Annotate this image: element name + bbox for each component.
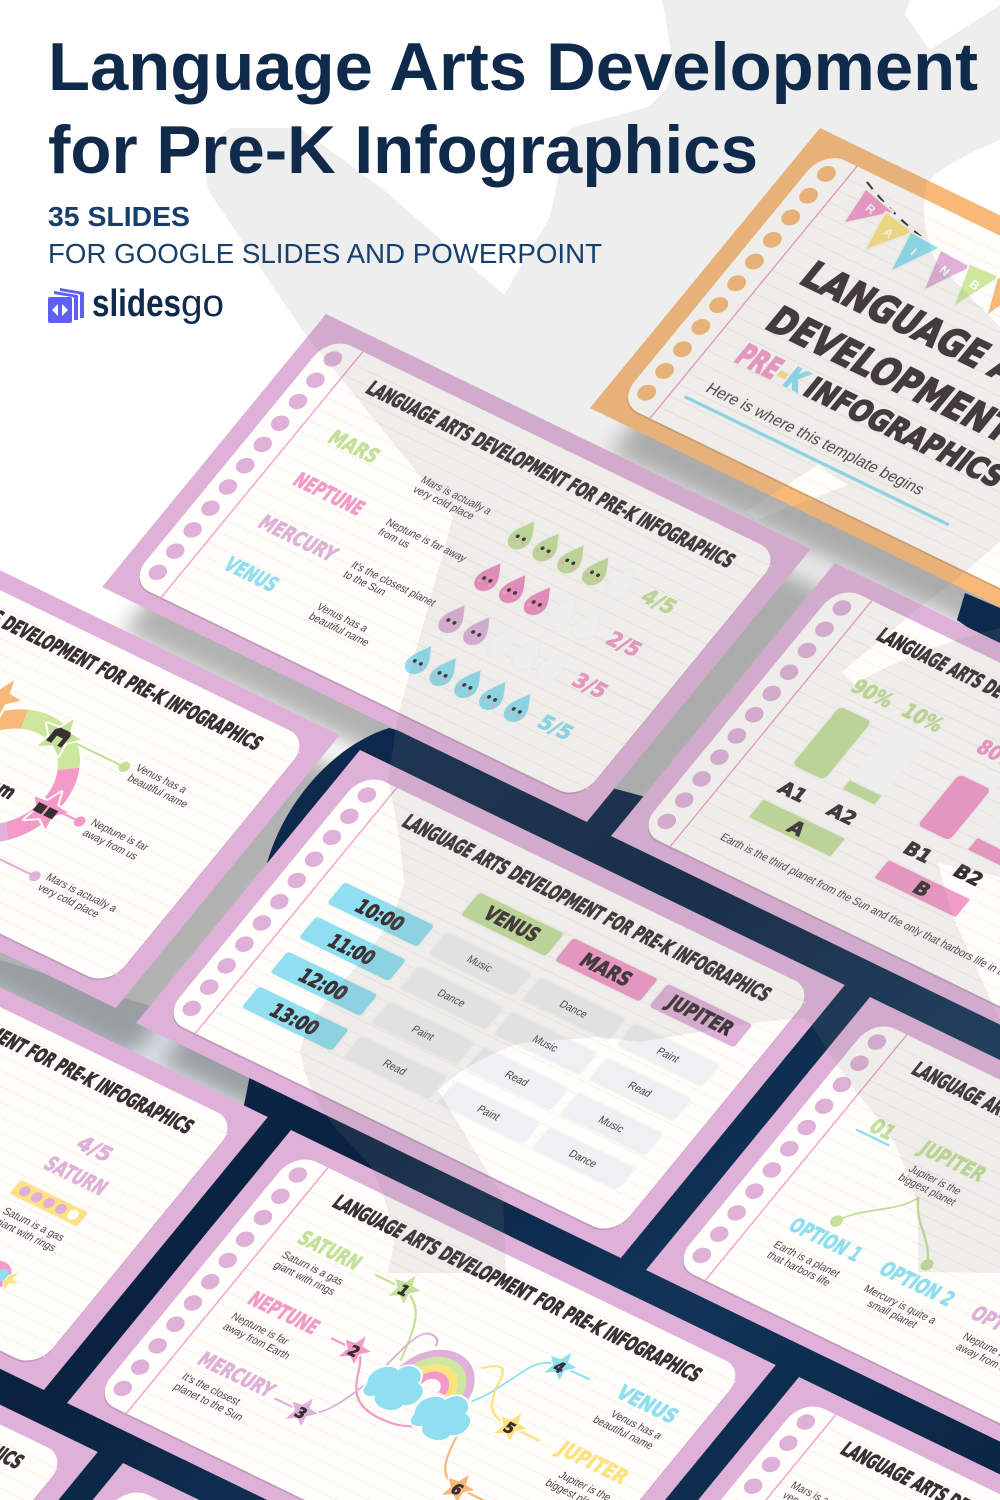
connector curves	[274, 1275, 590, 1500]
group box A: A	[782, 817, 811, 841]
heading: Mercury: MERCURY	[192, 1347, 281, 1402]
text: Mars: very cold place	[35, 882, 102, 920]
percentages: 10%	[896, 699, 950, 737]
bunting flags: A	[881, 225, 897, 241]
heading: Neptune: NEPTUNE	[243, 1287, 325, 1339]
slide: cover	[590, 128, 1000, 646]
bunting flags	[845, 182, 1000, 314]
cloud: left	[354, 1354, 436, 1418]
main title line 2: for Pre-K Infographics	[48, 112, 758, 188]
heading: SATURN	[39, 1152, 113, 1200]
table cells: Dance	[556, 998, 590, 1021]
navy backdrop shape	[0, 728, 1000, 1500]
slide: schedule table	[136, 750, 845, 1258]
score: 4/5	[71, 1131, 119, 1166]
text: option 2: Mercury is quite a	[861, 1283, 939, 1327]
text: Saturn: giant with rings	[271, 1259, 338, 1298]
slide: bottom right	[575, 1377, 1000, 1500]
star 1	[384, 1270, 428, 1306]
bar labels: A1	[773, 778, 811, 807]
drops row: Mercury	[434, 601, 573, 684]
table cells: Read	[502, 1069, 531, 1089]
star 4: 4	[549, 1359, 569, 1377]
text: Venus: beautiful name	[306, 611, 372, 649]
star 3	[281, 1392, 325, 1428]
heading: Jupiter: JUPITER	[551, 1436, 635, 1489]
navy corner, top right	[957, 593, 1000, 650]
score 5/5: 5/5	[532, 710, 579, 745]
time: 11:00	[297, 915, 408, 982]
star 5: 5	[499, 1419, 519, 1438]
bar labels: B1	[898, 839, 937, 868]
text: Neptune: Neptune is far away	[383, 517, 469, 565]
heading: Mercury: MERCURY	[253, 510, 343, 566]
drops row: Mars	[503, 517, 642, 601]
slide: ring diagram	[0, 500, 340, 1008]
time: 12:00	[269, 950, 379, 1017]
header: Mars	[553, 937, 660, 1003]
star 3: 3	[291, 1404, 311, 1423]
heading: Venus: VENUS	[219, 552, 284, 596]
table cells: Dance	[566, 1148, 600, 1170]
header: Venus: VENUS	[478, 902, 546, 946]
cover subtitle: Here is where this template begins	[702, 380, 928, 499]
cover title line 3	[728, 338, 1000, 494]
slide title: LANGUAGE ARTS DEVELOPMENT FOR PRE-K INFOGRAPHICS	[361, 377, 740, 572]
text: Venus: beautiful name	[124, 773, 191, 811]
slide: Saturn rating	[0, 882, 268, 1390]
number 01: 01	[864, 1114, 902, 1144]
time: 10:00: 10:00	[350, 895, 410, 936]
text: Mercury: It's the closest planet	[348, 559, 439, 609]
header: Venus	[459, 891, 566, 957]
heading: Mars: MARS	[323, 425, 385, 468]
blue-grey background tint	[0, 960, 262, 1200]
heading: option 2: OPTION 2	[874, 1257, 961, 1311]
text: Jupiter: Jupiter is the	[906, 1163, 964, 1198]
text: option 2: small planet	[864, 1298, 920, 1331]
unicorn sticker	[0, 1254, 28, 1300]
text: Venus: Venus has a	[133, 762, 189, 796]
star: pink with book icon	[18, 784, 78, 832]
text: Saturn: Saturn is a gas	[279, 1249, 346, 1288]
table cells: Music	[529, 1033, 561, 1055]
number underline	[857, 1130, 888, 1145]
icon: slidesgo logo mark	[48, 288, 84, 323]
text: Venus: Venus has a	[608, 1408, 664, 1442]
group box C	[998, 920, 1000, 979]
platforms: FOR GOOGLE SLIDES AND POWERPOINT	[48, 238, 602, 269]
table cells: Read	[380, 1058, 409, 1078]
bar chart	[791, 699, 1000, 927]
group box B: B	[908, 878, 935, 902]
text: option 1: that harbors life	[764, 1249, 833, 1289]
bar labels: A2	[822, 800, 861, 830]
translucent background silhouette	[206, 0, 1000, 1273]
table cells: Music	[464, 954, 496, 975]
heading: Venus: VENUS	[611, 1381, 684, 1428]
group box B	[873, 859, 971, 918]
bunting flags: B	[967, 277, 983, 293]
percentages	[846, 674, 1000, 858]
slide: rainbow diagram	[67, 1130, 776, 1500]
bar labels: B2	[948, 861, 988, 891]
cover title line 3: -	[767, 357, 800, 390]
text: Neptune: from us	[375, 526, 413, 551]
header: Jupiter: JUPITER	[660, 990, 739, 1040]
star: orange	[0, 672, 31, 720]
bunting flags: N	[937, 263, 952, 279]
slide: bottom centre	[0, 1463, 608, 1500]
percentages: 90%	[846, 674, 900, 712]
branches with dots	[827, 1174, 969, 1272]
star: green with building icon	[31, 711, 91, 759]
star 6	[437, 1469, 481, 1500]
text: Neptune: Neptune is far	[228, 1311, 292, 1347]
slide: options tree	[646, 997, 1000, 1500]
text: Mercury: It's the closest	[179, 1371, 243, 1408]
heading: Neptune: NEPTUNE	[288, 468, 370, 520]
star 6: 6	[447, 1481, 467, 1499]
rainbow	[398, 1340, 489, 1404]
table cells: Paint	[408, 1024, 437, 1043]
yellow rating bar	[8, 1179, 89, 1227]
heading: option 1: OPTION 1	[784, 1213, 868, 1266]
bar labels	[773, 777, 988, 892]
table cells: Dance	[434, 987, 468, 1010]
ring chart	[0, 700, 96, 853]
table cells: Music	[595, 1114, 627, 1136]
heading: Saturn: SATURN	[292, 1226, 367, 1274]
text: Mercury: planet to the Sun	[171, 1381, 246, 1423]
star 5	[490, 1407, 534, 1443]
description: Saturn is a gas	[0, 1205, 67, 1244]
time: 11:00: 11:00	[322, 930, 381, 969]
text: Mars: Mars is actually a	[418, 474, 494, 517]
time: 10:00	[326, 881, 436, 948]
text: Mercury: to the Sun	[340, 569, 389, 598]
bunting flags: R	[863, 201, 879, 217]
text: Jupiter: biggest planet	[895, 1172, 959, 1208]
slide: bottom left	[0, 1217, 98, 1500]
table cells	[342, 931, 721, 1191]
main title: Language Arts Development	[48, 29, 978, 105]
text: Mars: very cold place	[410, 484, 477, 522]
header: Jupiter	[648, 982, 754, 1049]
cloud: right	[402, 1384, 484, 1448]
time: 12:00: 12:00	[293, 964, 353, 1005]
score 3/5: 3/5	[567, 668, 613, 703]
group box A	[748, 798, 846, 858]
slide count: 35 SLIDES	[48, 201, 190, 232]
logo wordmark: slidesgo	[92, 283, 224, 325]
text: Neptune: away from Earth	[220, 1321, 293, 1362]
cover title line 3: K	[777, 362, 816, 398]
table cells: Paint	[654, 1046, 682, 1065]
text: Venus: beautiful name	[590, 1414, 656, 1452]
bunting flags: I	[908, 245, 919, 258]
star 2: 2	[343, 1342, 363, 1361]
connector lines	[0, 744, 124, 876]
slide title: LANGUAGE ARTS DEVELOPMENT FOR PRE-K INFOGRAPHICS	[328, 1191, 707, 1386]
table cells: Paint	[474, 1103, 502, 1123]
drops row: Venus	[400, 642, 539, 725]
slide: drop ratings	[102, 314, 811, 822]
star 1: 1	[393, 1282, 413, 1300]
text: option 1: Earth is a planet	[770, 1239, 842, 1280]
score 2/5: 2/5	[601, 627, 647, 661]
text: Neptune: away from us	[80, 827, 140, 863]
time: 13:00	[240, 985, 350, 1052]
drops row: Neptune	[469, 559, 609, 642]
star 2	[334, 1331, 378, 1366]
connector dots	[27, 760, 133, 883]
slide: bar chart	[611, 563, 1000, 1071]
text: Venus: Venus has a	[314, 601, 371, 635]
slide title: LANGUAGE ARTS DEVELOPMENT FOR PRE-K INFOGRAPHICS	[397, 811, 776, 1006]
score 4/5: 4/5	[636, 584, 682, 619]
time: 13:00: 13:00	[264, 999, 324, 1040]
table cells: Read	[625, 1080, 654, 1100]
text: Neptune: Neptune is far	[88, 817, 151, 854]
text: Mars: Mars is actually a	[43, 872, 119, 915]
blue underline	[686, 397, 948, 524]
star 4	[539, 1347, 584, 1383]
header: Mars: MARS	[574, 949, 638, 991]
cover title line 3: PRE	[728, 338, 790, 385]
